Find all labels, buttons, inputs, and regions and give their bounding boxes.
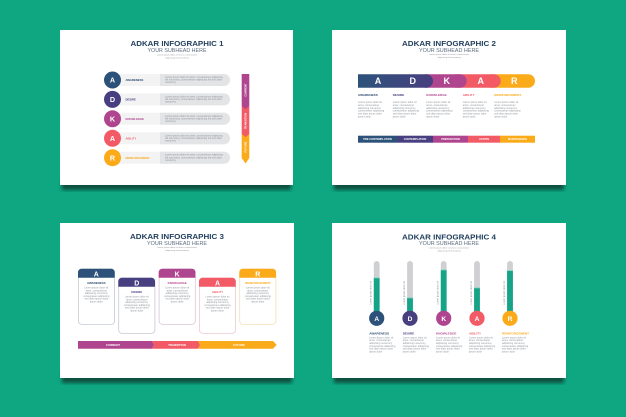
- column: knowledge: ipsum dolor: [426, 116, 439, 118]
- arrow: vertical timeline: TRANSITION: [244, 113, 248, 129]
- row: reinforcement: nonummy: [165, 159, 177, 162]
- card: awareness: sed diam ipsum dolor: [84, 298, 108, 301]
- row: awareness: AWARENESS: [126, 78, 144, 82]
- column: ability: amet, consectetuer: [463, 104, 484, 107]
- intro text 3: Lorem ipsum dolor sit amet, consectetuer: [157, 247, 197, 249]
- thermometer: reinforcement: Lorem ipsum dolor sit: [502, 336, 526, 339]
- segmented ADKAR bar: R: [511, 76, 518, 86]
- title 4: ADKAR INFOGRAPHIC 4: [402, 232, 497, 241]
- thermometer: awareness: Lorem ipsum dolor sit: [369, 336, 393, 339]
- card: ability: Lorem ipsum dolor sit: [206, 296, 229, 298]
- column: knowledge: consectetuer adipiscing: [426, 110, 453, 113]
- card: awareness: ipsum dolor: [90, 300, 103, 304]
- card: knowledge: adipiscing nonummy: [166, 292, 189, 295]
- column: reinforcement: amet, consectetuer: [494, 104, 516, 107]
- thermometer: desire: consectetuer adipiscing: [403, 345, 429, 348]
- panel: ADKAR infographic 2: [332, 30, 566, 190]
- column: reinforcement: Lorem ipsum dolor sit: [494, 101, 518, 104]
- card: ability: consectetuer adipiscing: [204, 304, 231, 307]
- row: desire: elit nonummy, consectetuer adipiscing elit sed diam: [165, 98, 222, 101]
- card: desire: amet, consectetuer: [126, 298, 148, 301]
- card: awareness: AWARENESS: [87, 281, 106, 285]
- thermometer: reinforcement: [502, 261, 529, 353]
- subhead 2: YOUR SUBHEAD HERE: [419, 48, 479, 54]
- stage bar: ACTION: [479, 137, 489, 141]
- row: awareness: [104, 72, 230, 88]
- card: ability: ABILITY: [212, 290, 223, 294]
- arrow: horizontal timeline: FUTURE: [233, 343, 245, 347]
- row: ability: [104, 130, 230, 147]
- card: knowledge: Lorem ipsum dolor sit: [165, 286, 189, 290]
- thermometer: knowledge: sed diam ipsum dolor: [436, 348, 460, 351]
- column: ability: [463, 93, 489, 118]
- card: reinforcement: amet, consectetuer: [247, 289, 269, 292]
- card: ability: sed diam ipsum dolor: [206, 307, 230, 310]
- column: ability: Lorem ipsum dolor sit: [463, 101, 487, 104]
- thermometer: reinforcement: Lorem ipsum dolor sit: [503, 281, 506, 305]
- row: desire: nonummy: [165, 101, 177, 104]
- card: ability: adipiscing nonummy: [206, 301, 230, 304]
- subhead 1: YOUR SUBHEAD HERE: [148, 48, 207, 54]
- row: knowledge: elit nonummy, consectetuer adipiscing elit sed diam: [165, 117, 222, 120]
- row: knowledge: K: [110, 114, 116, 123]
- card: awareness: [78, 269, 115, 324]
- column: knowledge: KNOWLEDGE: [426, 93, 447, 97]
- card: ability: ipsum dolor: [211, 310, 224, 312]
- card: desire: [118, 278, 155, 333]
- column: ability: ipsum dolor: [463, 116, 476, 118]
- column: awareness: adipiscing nonummy: [358, 107, 382, 110]
- row: awareness: A: [110, 76, 115, 85]
- thermometer: reinforcement: adipiscing nonummy: [502, 342, 526, 345]
- column: reinforcement: REINFORCEMENT: [494, 93, 521, 97]
- thermometer: desire: [402, 261, 429, 353]
- column: desire: Lorem ipsum dolor sit: [393, 101, 417, 104]
- column: awareness: amet, consectetuer: [358, 104, 379, 107]
- card: desire: consectetuer adipiscing: [124, 304, 150, 307]
- card: desire: D: [134, 280, 139, 287]
- card: awareness: Lorem ipsum dolor sit: [84, 286, 108, 290]
- thermometer: knowledge: [436, 261, 463, 353]
- thermometer: awareness: [369, 261, 396, 353]
- segmented ADKAR bar: A: [375, 76, 382, 86]
- row: desire: DESIRE: [126, 98, 136, 102]
- row: knowledge: nonummy: [165, 120, 177, 123]
- column: ability: consectetuer adipiscing: [463, 110, 489, 113]
- thermometer: reinforcement: amet, consectetuer: [502, 339, 523, 342]
- stage bar: PREPARATION: [441, 137, 460, 141]
- thermometer: reinforcement: sed diam ipsum dolor: [502, 348, 526, 351]
- thermometer: awareness: sed diam ipsum dolor: [369, 348, 393, 351]
- thermometer: ability: adipiscing nonummy: [469, 342, 493, 345]
- row: awareness: nonummy: [165, 81, 177, 84]
- intro text 3: adipiscing elit nonummy: [165, 249, 190, 252]
- thermometer: desire: Lorem ipsum dolor sit: [403, 281, 406, 305]
- column: knowledge: [426, 93, 453, 118]
- panel: ADKAR infographic 4: [332, 223, 566, 383]
- thermometer: desire: DESIRE: [403, 331, 414, 335]
- row: ability: Lorem ipsum dolor sit amet, consectetuer adipiscing: [165, 134, 223, 137]
- row: ability: ABILITY: [126, 136, 137, 140]
- arrow: vertical timeline: FUTURE: [244, 141, 248, 152]
- card: reinforcement: R: [255, 271, 260, 278]
- arrow: horizontal timeline: TRANSITION: [168, 343, 186, 347]
- card: knowledge: K: [175, 271, 180, 278]
- thermometer: awareness: amet, consectetuer: [369, 339, 391, 342]
- column: awareness: AWARENESS: [358, 93, 378, 97]
- stage bar: PRE CONTEMPLATION: [363, 137, 392, 141]
- row: knowledge: KNOWLEDGE: [126, 117, 144, 121]
- column: reinforcement: ipsum dolor: [494, 116, 507, 118]
- column: reinforcement: adipiscing nonummy: [494, 107, 518, 110]
- card: knowledge: [159, 269, 195, 324]
- thermometer: knowledge: adipiscing nonummy: [436, 342, 460, 345]
- thermometer: ability: amet, consectetuer: [469, 339, 490, 342]
- column: ability: sed diam ipsum dolor: [463, 113, 487, 116]
- card: ability: [199, 278, 236, 333]
- column: ability: adipiscing nonummy: [463, 107, 486, 110]
- subhead 3: YOUR SUBHEAD HERE: [147, 241, 207, 247]
- title 2: ADKAR INFOGRAPHIC 2: [402, 39, 496, 48]
- thermometer: reinforcement: consectetuer adipiscing: [502, 345, 529, 348]
- card: knowledge: amet, consectetuer: [167, 289, 188, 292]
- card: desire: sed diam ipsum dolor: [125, 307, 149, 310]
- thermometer: awareness: A: [374, 316, 379, 323]
- card: ability: amet, consectetuer: [207, 298, 228, 301]
- column: awareness: sed diam ipsum dolor: [358, 113, 382, 116]
- stage bar: [358, 136, 535, 143]
- title 1: ADKAR INFOGRAPHIC 1: [130, 39, 224, 48]
- thermometer: ability: ipsum dolor: [469, 350, 482, 353]
- column: desire: [393, 93, 419, 118]
- thermometer: awareness: consectetuer adipiscing: [369, 345, 396, 348]
- column: desire: DESIRE: [393, 93, 404, 97]
- arrow: vertical timeline: [242, 74, 249, 164]
- thermometer: knowledge: amet, consectetuer: [436, 339, 457, 342]
- stage bar: MAINTENANCE: [508, 137, 527, 141]
- arrow: horizontal timeline: [78, 341, 277, 349]
- row: ability: A: [110, 134, 115, 143]
- row: reinforcement: REINFORCEMENT: [126, 156, 150, 160]
- row: reinforcement: elit nonummy, consectetuer adipiscing elit sed diam: [165, 156, 222, 159]
- row: desire: D: [110, 95, 115, 104]
- thermometer: awareness: AWARENESS: [369, 331, 389, 335]
- column: reinforcement: consectetuer adipiscing: [494, 110, 521, 113]
- intro text 1: adipiscing elit nonummy: [165, 56, 190, 59]
- card: desire: adipiscing nonummy: [125, 301, 149, 304]
- card: knowledge: sed diam ipsum dolor: [165, 298, 189, 301]
- row: desire: Lorem ipsum dolor sit amet, consectetuer adipiscing: [165, 95, 223, 98]
- row: ability: nonummy: [165, 140, 177, 142]
- thermometer: reinforcement: ipsum dolor: [502, 350, 515, 353]
- segmented ADKAR bar: [358, 74, 535, 88]
- card: reinforcement: REINFORCEMENT: [245, 281, 271, 285]
- stage bar: CONTEMPLATION: [404, 137, 426, 141]
- column: desire: consectetuer adipiscing: [393, 110, 419, 113]
- title 3: ADKAR INFOGRAPHIC 3: [130, 232, 224, 241]
- column: desire: amet, consectetuer: [393, 104, 414, 107]
- card: awareness: consectetuer adipiscing: [83, 295, 110, 298]
- row: knowledge: Lorem ipsum dolor sit amet, consectetuer adipiscing: [165, 115, 223, 118]
- card: desire: ipsum dolor: [130, 310, 143, 312]
- thermometer: awareness: ipsum dolor: [369, 350, 382, 353]
- row: reinforcement: [104, 149, 230, 166]
- card: desire: Lorem ipsum dolor sit: [125, 296, 149, 298]
- card: knowledge: ipsum dolor: [171, 300, 184, 304]
- card: ability: A: [215, 280, 220, 287]
- thermometer: knowledge: Lorem ipsum dolor sit: [436, 336, 460, 339]
- column: knowledge: Lorem ipsum dolor sit: [426, 101, 450, 104]
- arrow: horizontal timeline: CURRENT: [106, 343, 120, 347]
- thermometer: desire: adipiscing nonummy: [403, 342, 426, 345]
- thermometer: ability: sed diam ipsum dolor: [469, 348, 493, 351]
- column: awareness: consectetuer adipiscing: [358, 110, 385, 113]
- column: knowledge: adipiscing nonummy: [426, 107, 450, 110]
- card: awareness: amet, consectetuer: [86, 289, 107, 292]
- row: knowledge: [104, 110, 230, 127]
- intro text 4: adipiscing elit nonummy: [437, 249, 462, 252]
- thermometer: ability: [469, 261, 496, 353]
- card: knowledge: KNOWLEDGE: [168, 281, 187, 285]
- thermometer: desire: sed diam ipsum dolor: [403, 348, 427, 351]
- card: reinforcement: ipsum dolor: [251, 300, 264, 304]
- row: ability: elit nonummy, consectetuer adipiscing elit sed diam: [165, 137, 222, 140]
- intro text 1: Lorem ipsum dolor sit amet, consectetuer: [157, 54, 197, 56]
- segmented ADKAR bar: A: [477, 76, 484, 86]
- thermometer: ability: A: [475, 316, 480, 323]
- intro text 2: adipiscing elit nonummy: [437, 56, 462, 59]
- card: awareness: A: [94, 271, 99, 278]
- column: knowledge: sed diam ipsum dolor: [426, 113, 450, 116]
- segmented ADKAR bar: D: [409, 76, 416, 86]
- row: awareness: elit nonummy, consectetuer adipiscing elit sed diam: [165, 79, 222, 82]
- card: reinforcement: consectetuer adipiscing: [245, 295, 271, 298]
- column: awareness: Lorem ipsum dolor sit: [358, 101, 382, 104]
- thermometer: desire: Lorem ipsum dolor sit: [403, 336, 427, 339]
- thermometer: desire: ipsum dolor: [403, 350, 416, 353]
- thermometer: ability: ABILITY: [469, 331, 482, 335]
- column: ability: ABILITY: [463, 93, 476, 97]
- thermometer: knowledge: ipsum dolor: [436, 350, 449, 353]
- card: reinforcement: adipiscing nonummy: [246, 292, 270, 295]
- thermometer: ability: Lorem ipsum dolor sit: [469, 336, 493, 339]
- row: desire: [104, 91, 230, 108]
- column: desire: ipsum dolor: [393, 116, 406, 118]
- arrow: vertical timeline: CURRENT: [244, 83, 248, 97]
- thermometer: knowledge: Lorem ipsum dolor sit: [436, 281, 440, 305]
- panel: ADKAR infographic 1: [60, 30, 293, 190]
- thermometer: desire: D: [408, 316, 413, 323]
- thermometer: knowledge: K: [441, 316, 446, 323]
- card: reinforcement: Lorem ipsum dolor sit: [246, 286, 270, 290]
- row: reinforcement: Lorem ipsum dolor sit amet, consectetuer adipiscing: [165, 154, 223, 157]
- card: awareness: adipiscing nonummy: [85, 292, 108, 295]
- column: knowledge: amet, consectetuer: [426, 104, 448, 107]
- thermometer: knowledge: KNOWLEDGE: [436, 331, 456, 335]
- thermometer: reinforcement: R: [508, 316, 513, 323]
- thermometer: awareness: Lorem ipsum dolor sit: [370, 281, 372, 305]
- column: awareness: ipsum dolor: [358, 116, 371, 118]
- thermometer: reinforcement: REINFORCEMENT: [502, 331, 529, 335]
- card: desire: DESIRE: [131, 290, 142, 294]
- intro text 4: Lorem ipsum dolor sit amet, consectetuer: [429, 247, 469, 249]
- thermometer: desire: amet, consectetuer: [403, 339, 424, 342]
- column: reinforcement: sed diam ipsum dolor: [494, 113, 518, 116]
- thermometer: ability: Lorem ipsum dolor sit: [470, 281, 473, 305]
- column: awareness: [358, 93, 385, 118]
- subhead 4: YOUR SUBHEAD HERE: [419, 241, 479, 247]
- panel: ADKAR infographic 3: [60, 223, 294, 383]
- column: reinforcement: [494, 93, 521, 118]
- column: desire: adipiscing nonummy: [393, 107, 416, 110]
- thermometer: knowledge: consectetuer adipiscing: [436, 345, 463, 348]
- intro text 2: Lorem ipsum dolor sit amet, consectetuer: [429, 54, 469, 56]
- thermometer: ability: consectetuer adipiscing: [469, 345, 496, 348]
- segmented ADKAR bar: K: [443, 76, 450, 86]
- card: reinforcement: sed diam ipsum dolor: [246, 298, 270, 301]
- row: awareness: Lorem ipsum dolor sit amet, consectetuer adipiscing: [165, 76, 223, 79]
- row: reinforcement: R: [110, 153, 116, 162]
- card: reinforcement: [239, 269, 276, 324]
- card: knowledge: consectetuer adipiscing: [164, 295, 191, 298]
- column: desire: sed diam ipsum dolor: [393, 113, 417, 116]
- thermometer: awareness: adipiscing nonummy: [369, 342, 393, 345]
